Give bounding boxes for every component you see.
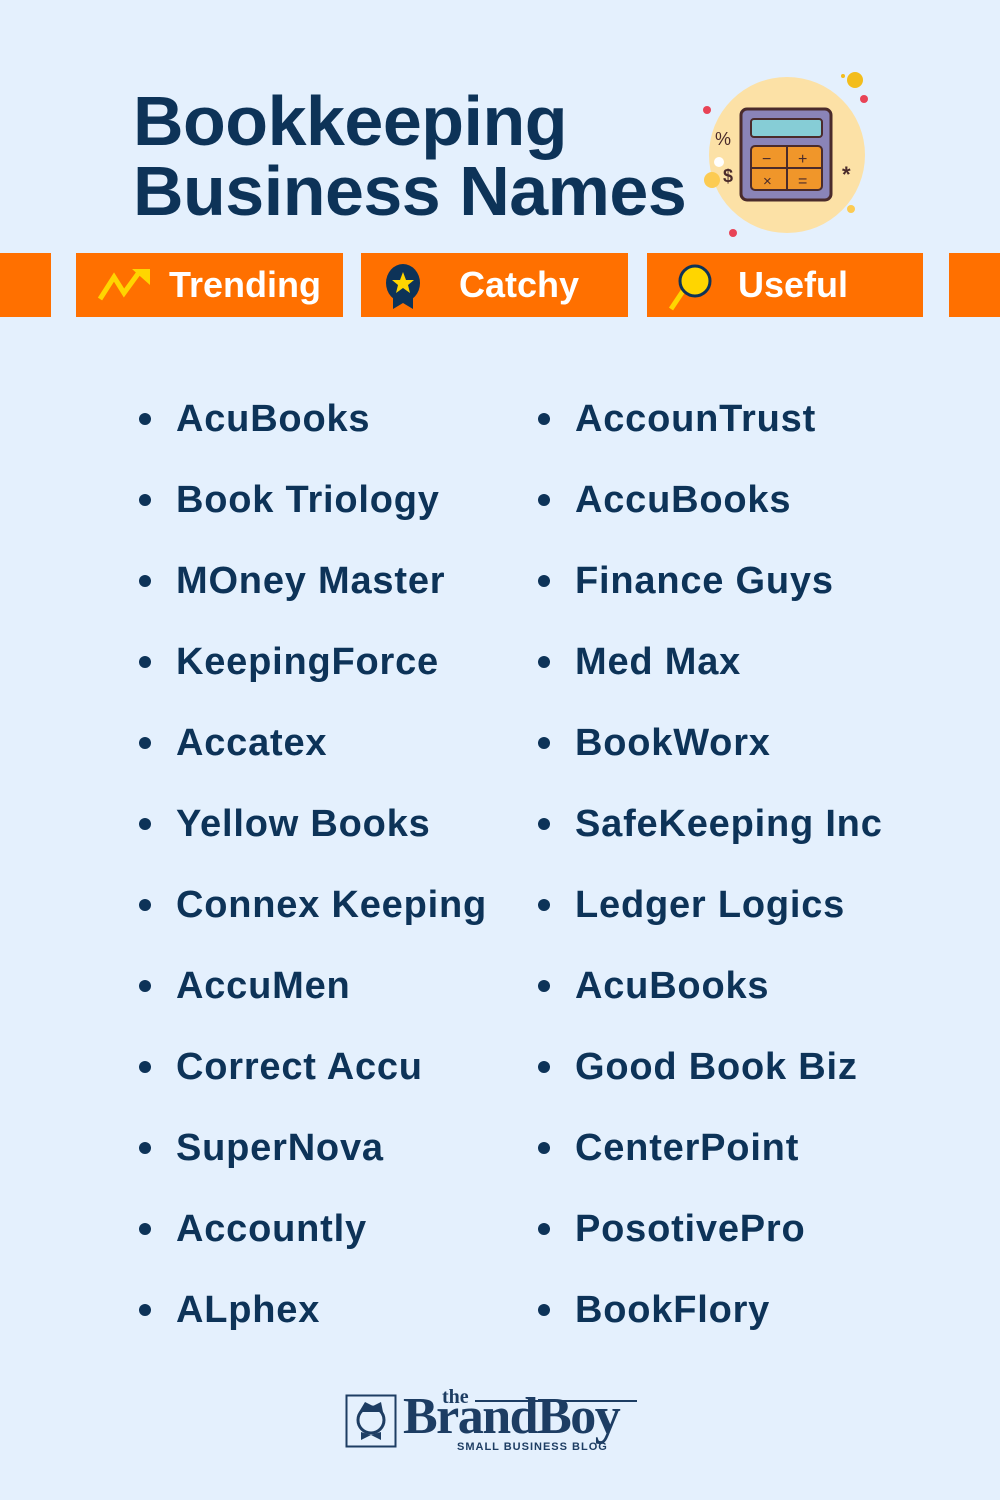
list: left column: ALphex [176,1289,320,1331]
title [133,82,686,230]
title: Bookkeeping [133,82,567,160]
list: right column [538,398,883,1331]
list: right column: SafeKeeping Inc [575,803,883,845]
list: left column: MOney Master [176,560,445,602]
list: left column: Accountly [176,1208,367,1250]
icon: calculator: * [842,162,851,187]
tab: useful: Useful [738,264,848,305]
icon: calculator: $ [723,166,733,186]
list: left column [139,398,487,1331]
icon: calculator: + [798,151,807,168]
list: right column: Ledger Logics [575,884,845,926]
icon: calculator: − [762,151,771,168]
list: right column: BookWorx [575,722,771,764]
list: left column: AccuMen [176,965,351,1007]
tab stub right [949,253,1000,317]
list: right column: BookFlory [575,1289,770,1331]
list: left column: AcuBooks [176,398,370,440]
tab stub left [0,253,51,317]
list: right column: AccuBooks [575,479,791,521]
icon: calculator: % [715,129,731,149]
list: left column: Yellow Books [176,803,431,845]
list: left column: SuperNova [176,1127,384,1169]
list: left column: Connex Keeping [176,884,487,926]
list: left column: KeepingForce [176,641,439,683]
icon: calculator: = [798,173,807,190]
logo: the BrandBoy [346,1386,637,1453]
icon: trend arrow [98,269,150,300]
list: right column: PosotivePro [575,1208,806,1250]
list: right column: Finance Guys [575,560,834,602]
title: Business Names [133,152,686,230]
icon: magnifier [669,264,712,310]
list: right column: CenterPoint [575,1127,799,1169]
list: left column: Accatex [176,722,327,764]
list: right column: Good Book Biz [575,1046,858,1088]
list: right column: Med Max [575,641,741,683]
tab: trending: Trending [169,264,321,305]
tab: catchy [361,253,628,317]
tab: trending [76,253,343,317]
list: right column: AcuBooks [575,965,769,1007]
list: left column: Book Triology [176,479,440,521]
logo: the BrandBoy: BrandBoy [403,1388,619,1445]
logo: the BrandBoy: SMALL BUSINESS BLOG [457,1441,608,1453]
tab: catchy: Catchy [459,264,579,305]
list: left column: Correct Accu [176,1046,423,1088]
logo: the BrandBoy: the [442,1386,469,1408]
icon: calculator [703,72,868,237]
list: right column: AccounTrust [575,398,816,440]
tab: useful [647,253,923,317]
icon: calculator: × [763,173,772,190]
icon: boy face [346,1394,396,1448]
icon: badge [386,264,420,309]
